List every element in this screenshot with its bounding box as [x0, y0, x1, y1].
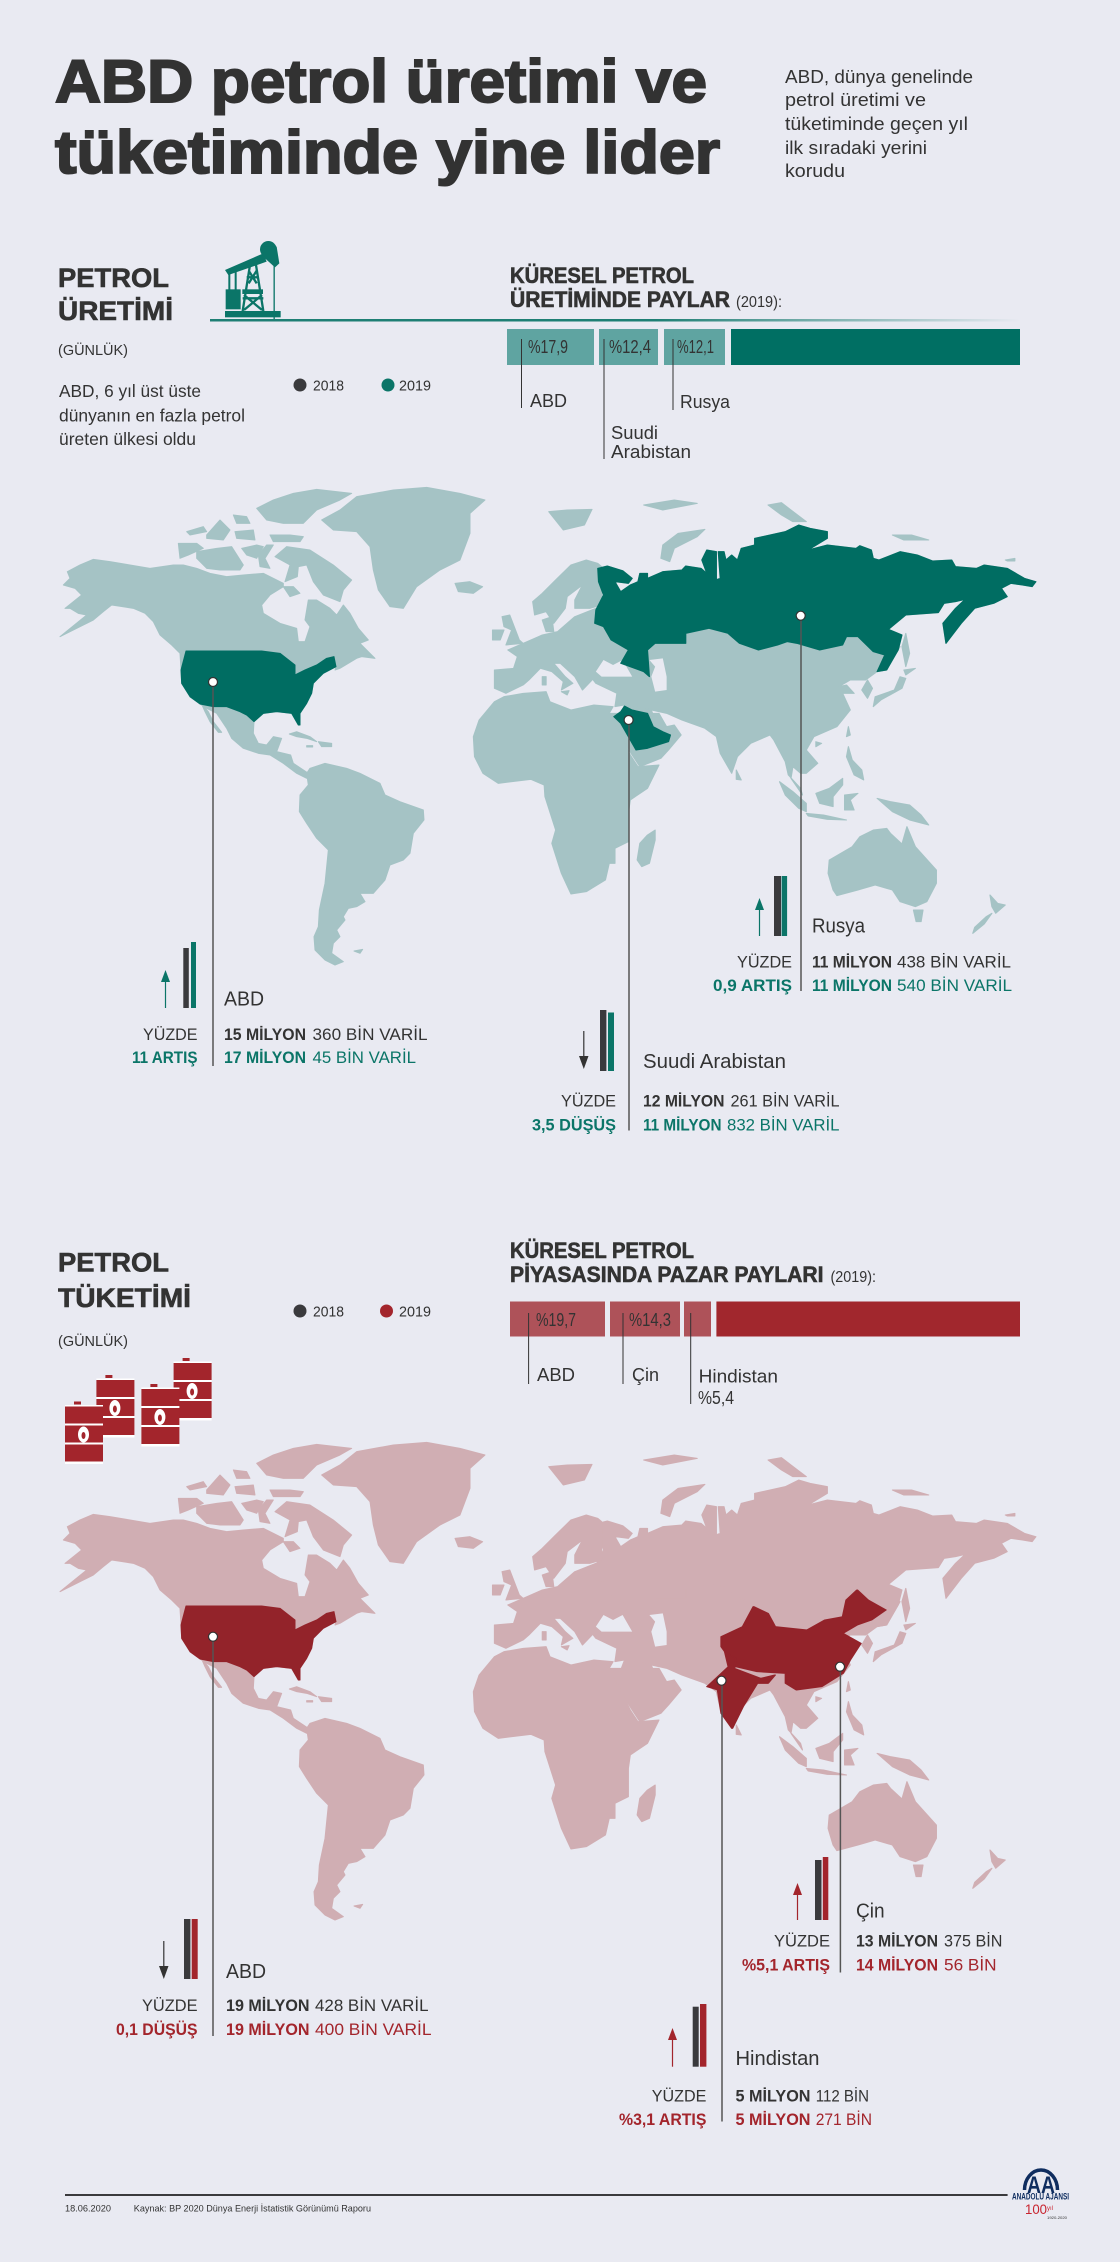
callout: ABD consumption: 19 MİLYON [226, 1997, 310, 2015]
share labels: Arabistan [611, 442, 691, 462]
callout: ABD consumption: 19 MİLYON [226, 2021, 310, 2039]
heading: global market shares: PİYASASINDA PAZAR PAYLARI [510, 1262, 824, 1287]
heading: petrol üretimi: PETROL [58, 263, 169, 293]
share bar [510, 1302, 1020, 1336]
share bar: %12,4 [609, 337, 651, 357]
callout: Rusya production [713, 611, 1012, 995]
callout: ABD production [132, 678, 428, 1067]
heading: petrol üretimi [58, 263, 173, 326]
legend: 2018 [313, 1304, 344, 1320]
callout: Suudi Arabistan production: YÜZDE [561, 1092, 616, 1110]
callout: Çin consumption: 56 BİN [944, 1956, 997, 1974]
logo: Anadolu Ajansı: 1920-2020 [1047, 2215, 1068, 2220]
share bar: %19,7 [536, 1310, 576, 1330]
heading: petrol tüketimi [58, 1248, 191, 1313]
intro text: korudu [785, 160, 845, 181]
callout: Rusya production: 540 BİN VARİL [897, 976, 1012, 995]
callout: ABD production: 17 MİLYON [224, 1049, 306, 1067]
callout: ABD production: YÜZDE [143, 1026, 198, 1044]
daily note: (GÜNLÜK) [58, 341, 128, 359]
logo: Anadolu Ajansı: ANADOLU AJANSI [1012, 2192, 1069, 2202]
heading: global production shares [510, 263, 782, 312]
callout: Hindistan consumption: 271 BİN [816, 2110, 872, 2129]
callout: ABD consumption [116, 1632, 432, 2039]
share labels [529, 1313, 778, 1408]
callout: Hindistan consumption: Hindistan [736, 2048, 820, 2070]
title [55, 48, 720, 186]
legend: 2019 [399, 378, 431, 394]
intro text: petrol üretimi ve [785, 89, 926, 110]
callout: Hindistan consumption: YÜZDE [652, 2088, 706, 2106]
callout: Çin consumption: 14 MİLYON [856, 1956, 938, 1974]
heading: global production shares: KÜRESEL PETROL [510, 263, 694, 288]
legend [294, 1304, 431, 1320]
icon: oil pump [225, 241, 281, 319]
intro text [785, 66, 973, 181]
callout: Suudi Arabistan production: Suudi Arabistan [643, 1051, 786, 1073]
callout: Çin consumption [742, 1662, 1002, 1974]
callout: Suudi Arabistan production: 832 BİN VARİL [727, 1116, 840, 1134]
title: tüketiminde yine lider [55, 119, 720, 186]
callout: Suudi Arabistan production: 12 MİLYON [643, 1092, 724, 1110]
footer: date and source: Kaynak: BP 2020 Dünya Enerji İstatistik Görünümü Raporu [134, 2204, 371, 2214]
callout: Rusya production: 11 MİLYON [812, 977, 892, 995]
callout: Çin consumption: Çin [856, 1900, 885, 1922]
share labels: Çin [632, 1365, 659, 1385]
callout: Hindistan consumption: %3,1 ARTIŞ [619, 2111, 706, 2129]
map: production [60, 487, 1036, 965]
callout: Rusya production: 11 MİLYON [812, 954, 892, 972]
title: ABD petrol üretimi ve [55, 48, 707, 115]
share labels: %5,4 [698, 1388, 734, 1408]
heading: global production shares: ÜRETİMİNDE PAYLAR [510, 287, 730, 312]
map: consumption [60, 1442, 1036, 1920]
intro text: ilk sıradaki yerini [785, 137, 927, 158]
callout: ABD consumption: 400 BİN VARİL [315, 2020, 432, 2039]
callout: Suudi Arabistan production: 3,5 DÜŞÜŞ [532, 1116, 616, 1134]
callout: ABD production: 11 ARTIŞ [132, 1049, 198, 1067]
panel: consumption section [58, 1238, 1036, 2129]
callout: Hindistan consumption: 112 BİN [816, 2086, 869, 2106]
share labels: ABD [530, 391, 567, 411]
icon: oil barrels [65, 1358, 212, 1464]
description text: ABD, 6 yıl üst üste [59, 381, 201, 401]
heading: global market shares [510, 1238, 876, 1287]
share labels: Rusya [680, 392, 731, 412]
callout: Hindistan consumption [619, 1676, 872, 2129]
footer: date and source [65, 2194, 1008, 2214]
footer: date and source: 18.06.2020 [65, 2204, 111, 2214]
share labels: Suudi [611, 423, 658, 443]
share labels: Hindistan [699, 1366, 778, 1386]
callout: Çin consumption: 13 MİLYON [856, 1932, 938, 1950]
callout: ABD production: 15 MİLYON [224, 1026, 306, 1044]
logo: Anadolu Ajansı [1012, 2170, 1069, 2220]
callout: Suudi Arabistan production [532, 716, 840, 1134]
intro text: tüketiminde geçen yıl [785, 113, 968, 134]
callout: ABD production: ABD [224, 988, 264, 1010]
legend: 2019 [399, 1304, 431, 1320]
heading: petrol üretimi: ÜRETİMİ [58, 296, 173, 326]
callout: Çin consumption: YÜZDE [774, 1932, 830, 1950]
share bar: %17,9 [528, 337, 568, 357]
legend: 2018 [313, 378, 344, 394]
callout: ABD consumption: 0,1 DÜŞÜŞ [116, 2020, 198, 2039]
callout: Rusya production: 0,9 ARTIŞ [713, 977, 792, 995]
callout: Suudi Arabistan production: 11 MİLYON [643, 1116, 722, 1134]
logo: Anadolu Ajansı: yıl [1047, 2206, 1053, 2212]
share bar: %14,3 [629, 1310, 671, 1330]
panel: production section [58, 241, 1036, 1135]
heading: petrol tüketimi: PETROL [58, 1248, 169, 1278]
intro text: ABD, dünya genelinde [785, 66, 973, 87]
callout: Çin consumption: 375 BİN [944, 1932, 1002, 1950]
logo: Anadolu Ajansı: AA [1027, 2172, 1055, 2199]
description text [59, 381, 245, 449]
callout: ABD production: 360 BİN VARİL [312, 1025, 428, 1044]
callout: Rusya production: 438 BİN VARİL [897, 952, 1011, 972]
callout: ABD consumption: 428 BİN VARİL [315, 1996, 428, 2015]
share bar [507, 329, 1020, 365]
description text: üreten ülkesi oldu [59, 429, 196, 449]
callout: Hindistan consumption: 5 MİLYON [736, 2088, 810, 2106]
divider line [210, 319, 1020, 322]
callout: Rusya production: YÜZDE [737, 954, 792, 972]
daily note: (GÜNLÜK) [58, 1332, 128, 1350]
callout: ABD consumption: YÜZDE [142, 1997, 198, 2015]
logo: Anadolu Ajansı: 100 [1025, 2201, 1047, 2217]
heading: global market shares: KÜRESEL PETROL [510, 1238, 694, 1263]
share labels: ABD [537, 1365, 575, 1385]
callout: ABD consumption: ABD [226, 1961, 266, 1983]
heading: petrol tüketimi: TÜKETİMİ [58, 1283, 191, 1313]
share bar: %12,1 [677, 337, 714, 357]
callout: Hindistan consumption: 5 MİLYON [736, 2111, 810, 2129]
callout: Suudi Arabistan production: 261 BİN VARİL [730, 1092, 840, 1110]
description text: dünyanın en fazla petrol [59, 406, 245, 426]
callout: Çin consumption: %5,1 ARTIŞ [742, 1956, 830, 1974]
legend [294, 378, 431, 394]
heading: global production shares: (2019): [736, 294, 782, 311]
heading: global market shares: (2019): [830, 1269, 876, 1286]
share labels [522, 339, 731, 462]
callout: ABD production: 45 BİN VARİL [312, 1048, 416, 1067]
callout: Rusya production: Rusya [812, 916, 866, 938]
